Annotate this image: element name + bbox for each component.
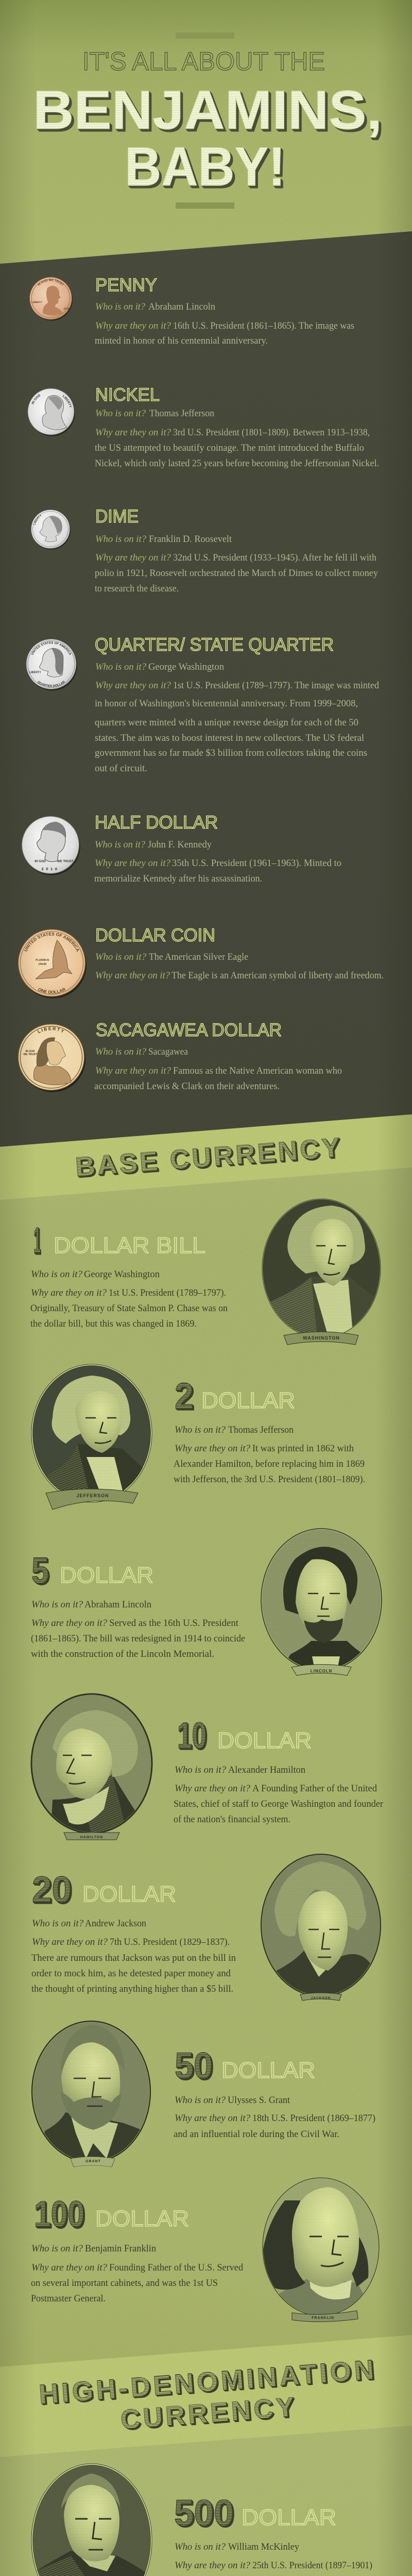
text: 500 dollar facts: 25th U.S. President (1897–1901) xyxy=(252,2561,372,2571)
portrait: Washington xyxy=(260,1196,383,1345)
text: 10 dollar facts xyxy=(174,1765,383,1825)
text: penny facts: minted in honor of his centennial anniversary. xyxy=(95,336,268,346)
text: nickel facts: Thomas Jefferson xyxy=(149,409,214,419)
text: 50 dollar facts: and an influential role during the Civil War. xyxy=(174,2129,339,2140)
text: quarter facts: in honor of Washington's bicentennial anniversary. From 1999–2008, xyxy=(95,699,358,709)
coin: penny: IN GOD WE TRUST xyxy=(37,279,64,286)
text: nickel facts: the US attempted to beautify coinage. The mint introduced the Buffalo xyxy=(95,443,364,453)
heading: 20 dollar xyxy=(32,1870,176,1910)
text: sacagawea facts: Who is on it? xyxy=(95,1047,147,1057)
heading: dime: DIME xyxy=(95,506,139,527)
text: 20 dollar facts: order to mock him, as he detested paper money and xyxy=(31,1969,231,1979)
coin: sacagawea dollar: LIBERTY xyxy=(37,1027,64,1033)
text: 20 dollar facts: Why are they on it? xyxy=(32,1937,108,1947)
coin: nickel: LIBERTY xyxy=(62,395,72,407)
text: dollar coin facts: The American Silver Eagle xyxy=(149,952,248,962)
coin item: nickel xyxy=(28,385,379,469)
text: half dollar facts: John F. Kennedy xyxy=(148,840,212,850)
coin item: dollar coin xyxy=(19,925,384,998)
heading: 1 dollar bill xyxy=(33,1221,205,1261)
heading: quarter: QUARTER/ STATE QUARTER xyxy=(95,635,334,655)
text: 20 dollar facts: Andrew Jackson xyxy=(85,1919,146,1929)
text: dime facts: to research the disease. xyxy=(95,584,179,594)
text: penny facts: Why are they on it? xyxy=(95,321,171,331)
portrait banner: JEFFERSON xyxy=(76,1493,109,1498)
portrait banner: WASHINGTON xyxy=(303,1335,340,1341)
text: 50 dollar facts xyxy=(174,2095,375,2140)
text: dime facts: Why are they on it? xyxy=(95,553,171,563)
text: 1 dollar facts: the dollar bill, but this was changed in 1869. xyxy=(30,1319,197,1329)
heading: 20 dollar: 20 xyxy=(32,1870,72,1910)
coin: dollar coin: PLURIBUS xyxy=(36,959,49,962)
panel: high-denomination currency xyxy=(0,2335,412,2576)
text: quarter facts xyxy=(95,662,380,774)
coin item: quarter xyxy=(26,635,380,774)
text: 50 dollar facts: Why are they on it? xyxy=(175,2113,251,2124)
text: dime facts: Who is on it? xyxy=(95,534,147,545)
coin: sacagawea dollar xyxy=(19,1024,85,1092)
text: 50 dollar facts: 18th U.S. President (1869–1877) xyxy=(252,2113,375,2124)
portrait banner xyxy=(292,2311,358,2322)
portrait: Grant xyxy=(29,2020,153,2167)
coin: dollar coin: UNITED STATES OF AMERICA xyxy=(24,933,79,952)
text: 100 dollar facts: Who is on it? xyxy=(31,2244,83,2254)
panel: header xyxy=(0,0,412,264)
text: 2 dollar facts: Thomas Jefferson xyxy=(228,1425,294,1435)
portrait banner xyxy=(284,1332,358,1345)
coin: penny: 2010 xyxy=(63,307,70,310)
text: half dollar facts: 35th U.S. President (1961–1963). Minted to xyxy=(172,858,341,869)
text: 50 dollar facts: Who is on it? xyxy=(175,2095,226,2106)
coin: dime xyxy=(31,510,71,550)
portrait banner xyxy=(300,1993,341,2001)
heading: high-denomination currency: HIGH-DENOMINATION xyxy=(38,2354,375,2410)
text: dime facts xyxy=(95,534,379,594)
coin: quarter: UNITED STATES OF AMERICA xyxy=(31,641,71,655)
heading: 5 dollar xyxy=(31,1551,153,1591)
section band: high-denomination xyxy=(0,2335,412,2457)
portrait: Hamilton xyxy=(30,1691,153,1840)
heading: 50 dollar: DOLLAR xyxy=(221,2058,315,2083)
coin: nickel xyxy=(28,388,75,436)
coin: half dollar: WE TRUST xyxy=(57,859,74,863)
portrait banner: FRANKLIN xyxy=(312,2316,334,2320)
bill item: 100 dollar xyxy=(31,2175,383,2322)
portrait banner xyxy=(64,1833,119,1840)
text: nickel facts: Who is on it? xyxy=(95,409,146,419)
coin item: penny xyxy=(30,275,354,346)
heading: 50 dollar: 50 xyxy=(175,2046,213,2087)
text: penny facts xyxy=(95,302,354,346)
heading: 10 dollar xyxy=(177,1716,312,1756)
text: sacagawea facts: Famous as the Native American woman who xyxy=(173,1066,342,1076)
title: main lines: BABY! xyxy=(125,135,285,197)
heading: 1 dollar bill: DOLLAR BILL xyxy=(54,1233,205,1258)
text: penny facts: Abraham Lincoln xyxy=(148,302,215,312)
coin item: sacagawea dollar xyxy=(19,1020,342,1092)
decorative bar: bottom xyxy=(176,202,234,209)
decorative bar: top xyxy=(176,32,234,39)
text: 5 dollar facts: Why are they on it? xyxy=(31,1618,108,1629)
coin: quarter: QUARTER DOLLAR xyxy=(38,681,65,687)
text: 500 dollar facts xyxy=(174,2542,372,2576)
text: 10 dollar facts: Alexander Hamilton xyxy=(228,1765,305,1775)
heading: 100 dollar: DOLLAR xyxy=(95,2206,189,2231)
portrait banner: HAMILTON xyxy=(80,1836,103,1839)
coin: penny xyxy=(30,277,73,320)
text: quarter facts: George Washington xyxy=(148,662,224,672)
text: nickel facts xyxy=(95,409,379,469)
text: dollar coin facts xyxy=(95,952,384,981)
portrait banner xyxy=(71,2157,115,2167)
text: 100 dollar facts xyxy=(31,2244,244,2304)
bill item: 20 dollar xyxy=(31,1853,383,2001)
text: 2 dollar facts: Why are they on it? xyxy=(175,1444,251,1454)
text: 50 dollar facts: Ulysses S. Grant xyxy=(228,2095,290,2106)
text: 10 dollar facts: of the nation's financial system. xyxy=(174,1815,290,1825)
heading: 500 dollar xyxy=(174,2493,336,2534)
heading: 5 dollar: DOLLAR xyxy=(60,1563,153,1588)
text: 2 dollar facts: Who is on it? xyxy=(175,1425,226,1435)
panel: base currency xyxy=(0,1114,412,2367)
heading: base currency: BASE CURRENCY xyxy=(74,1132,341,1182)
text: 500 dollar facts: William McKinley xyxy=(228,2542,300,2552)
portrait banner xyxy=(291,1664,351,1675)
text: dime facts: polio in 1921, Roosevelt orchestrated the March of Dimes to collect money xyxy=(95,568,379,579)
heading: high-denomination currency xyxy=(38,2354,375,2435)
heading: high-denomination currency: CURRENCY xyxy=(119,2392,295,2435)
text: 100 dollar facts: Benjamin Franklin xyxy=(85,2244,156,2254)
heading: 10 dollar: 10 xyxy=(177,1716,207,1756)
text: 1 dollar facts: 1st U.S. President (1789–1797). xyxy=(109,1288,226,1298)
text: 20 dollar facts: There are rumours that Jackson was put on the bill in xyxy=(31,1953,236,1963)
text: 1 dollar facts: Originally, Treasury of State Salmon P. Chase was on xyxy=(30,1303,228,1314)
text: 2 dollar facts: with Jefferson, the 3rd U.S. President (1801–1809). xyxy=(174,1475,365,1485)
portrait banner: JACKSON xyxy=(311,1996,331,2000)
heading: dollar coin: DOLLAR COIN xyxy=(95,925,215,945)
text: half dollar facts: Who is on it? xyxy=(95,840,146,850)
text: 2 dollar facts xyxy=(174,1425,365,1485)
heading: 1 dollar bill: 1 xyxy=(33,1221,41,1261)
coin: half dollar: 2010 xyxy=(41,867,60,871)
heading: 5 dollar: 5 xyxy=(31,1551,49,1591)
heading: penny: PENNY xyxy=(95,275,157,295)
bill item: 2 dollar xyxy=(30,1361,365,1510)
text: quarter facts: Why are they on it? xyxy=(95,681,171,691)
coin: dollar coin: ONE DOLLAR xyxy=(38,988,66,994)
text: quarter facts: out of circuit. xyxy=(95,764,147,774)
text: 100 dollar facts: on several important cabinets, and was the 1st US xyxy=(31,2278,218,2289)
text: nickel facts: 3rd U.S. President (1801–1809). Between 1913–1938, xyxy=(173,428,370,438)
text: quarter facts: states. The aim was to boost interest in new collectors. The US federal xyxy=(95,733,364,743)
text: 10 dollar facts: A Founding Father of the United xyxy=(252,1784,377,1794)
text: quarter facts: government has so far made $3 billion from collectors taking the coins xyxy=(95,748,367,758)
heading: 500 dollar: 500 xyxy=(174,2493,234,2534)
text: 500 dollar facts: Why are they on it? xyxy=(175,2561,251,2571)
text: 5 dollar facts xyxy=(31,1600,245,1659)
coin item: dime xyxy=(31,506,379,594)
text: 5 dollar facts: (1861–1865). The bill was redesigned in 1914 to coincide xyxy=(31,1634,245,1644)
heading: 20 dollar: DOLLAR xyxy=(82,1882,176,1907)
portrait: Lincoln xyxy=(260,1528,383,1675)
text: 10 dollar facts: Why are they on it? xyxy=(175,1784,251,1794)
text: 5 dollar facts: Abraham Lincoln xyxy=(84,1600,151,1610)
text: 500 dollar facts: Who is on it? xyxy=(175,2542,226,2552)
bill item: 500 dollar xyxy=(30,2463,372,2576)
section band: base currency xyxy=(0,1114,412,1200)
text: 20 dollar facts: 7th U.S. President (1829–1837). xyxy=(110,1937,230,1947)
text: 2 dollar facts: Alexander Hamilton, before replacing him in 1869 xyxy=(174,1459,365,1469)
text: sacagawea facts: Sacagawea xyxy=(148,1047,188,1057)
title: main lines xyxy=(33,79,382,197)
coin: nickel: IN GOD xyxy=(31,395,40,404)
heading: nickel: NICKEL xyxy=(95,385,160,405)
text: dime facts: Franklin D. Roosevelt xyxy=(149,534,232,545)
text: 1 dollar facts: Why are they on it? xyxy=(31,1288,107,1298)
heading: 2 dollar: DOLLAR xyxy=(201,1388,295,1413)
text: quarter facts: quarters were minted with a unique reverse design for each of the 50 xyxy=(95,718,358,728)
portrait banner: LINCOLN xyxy=(311,1669,332,1673)
coin: quarter: LIBERTY xyxy=(29,671,41,674)
coin: sacagawea dollar: WE TRUST xyxy=(23,1053,38,1056)
portrait: McKinley xyxy=(30,2463,153,2576)
heading: 100 dollar: 100 xyxy=(34,2194,84,2235)
text: dime facts: 32nd U.S. President (1933–1945). After he fell ill with xyxy=(173,553,376,563)
portrait banner xyxy=(46,1489,138,1510)
bill item: 5 dollar xyxy=(31,1528,383,1675)
title: small line: IT'S ALL ABOUT THE xyxy=(82,47,325,76)
text: quarter facts: 1st U.S. President (1789–1797). The image was minted xyxy=(173,681,380,691)
coin: half dollar: IN GOD xyxy=(35,859,46,863)
text: 100 dollar facts: Founding Father of the U.S. Served xyxy=(109,2263,244,2273)
bill item: 50 dollar xyxy=(29,2020,375,2167)
portrait banner: GRANT xyxy=(85,2160,101,2163)
text: penny facts: Who is on it? xyxy=(95,302,146,312)
text: 100 dollar facts: Why are they on it? xyxy=(31,2263,108,2273)
text: 1 dollar facts xyxy=(30,1269,228,1329)
text: 20 dollar facts xyxy=(31,1919,236,1994)
coin: dime: LIBERTY xyxy=(33,514,41,525)
text: 100 dollar facts: Postmaster General. xyxy=(31,2294,106,2304)
text: 10 dollar facts: Who is on it? xyxy=(175,1765,227,1775)
heading: 10 dollar: DOLLAR xyxy=(217,1728,312,1753)
text: dollar coin facts: Why are they on it? xyxy=(95,971,170,981)
text: nickel facts: Why are they on it? xyxy=(95,428,171,438)
text: 5 dollar facts: with the construction of the Lincoln Memorial. xyxy=(31,1649,214,1659)
text: 5 dollar facts: Served as the 16th U.S. President xyxy=(109,1618,239,1629)
text: dollar coin facts: Who is on it? xyxy=(95,952,147,962)
coin: dollar coin: UNUM xyxy=(39,963,46,966)
text: 1 dollar facts: Who is on it? xyxy=(31,1269,83,1280)
coin: sacagawea dollar: IN GOD xyxy=(25,1050,35,1053)
text: half dollar facts: Why are they on it? xyxy=(95,858,171,869)
portrait: Jefferson xyxy=(30,1361,153,1510)
heading: 2 dollar: 2 xyxy=(175,1376,194,1417)
heading: half dollar: HALF DOLLAR xyxy=(95,812,218,833)
coin: quarter xyxy=(26,639,77,690)
text: sacagawea facts: Why are they on it? xyxy=(95,1066,171,1076)
heading: 2 dollar xyxy=(175,1376,295,1417)
text: 20 dollar facts: Who is on it? xyxy=(32,1919,84,1929)
text: 5 dollar facts: Who is on it? xyxy=(31,1600,83,1610)
text: sacagawea facts: accompanied Lewis & Clark on their adventures. xyxy=(94,1081,280,1092)
text: 10 dollar facts: States, chief of staff to George Washington and founder xyxy=(174,1799,383,1809)
text: penny facts: 16th U.S. President (1861–1865). The image was xyxy=(173,321,354,331)
coin: half dollar xyxy=(22,816,80,875)
text: 20 dollar facts: the thought of printing anything higher than a $5 bill. xyxy=(31,1984,233,1994)
text: dollar coin facts: The Eagle is an American symbol of liberty and freedom. xyxy=(171,971,384,981)
text: sacagawea facts xyxy=(94,1047,342,1092)
bill item: 1 dollar xyxy=(30,1196,383,1345)
heading: 500 dollar: DOLLAR xyxy=(242,2505,336,2530)
text: quarter facts: Who is on it? xyxy=(95,662,147,672)
panel: coins xyxy=(0,231,411,1092)
text: half dollar facts xyxy=(94,840,341,884)
heading: 100 dollar xyxy=(34,2194,189,2235)
heading: sacagawea dollar: SACAGAWEA DOLLAR xyxy=(96,1020,282,1040)
portrait: Jackson xyxy=(259,1853,383,2001)
coin: penny: LIBERTY xyxy=(31,301,43,304)
title: main lines: BENJAMINS, xyxy=(33,79,382,141)
text: half dollar facts: memorialize Kennedy after his assassination. xyxy=(94,874,262,884)
bill item: 10 dollar xyxy=(30,1691,383,1840)
portrait: Franklin xyxy=(259,2175,383,2322)
text: nickel facts: Nickel, which only lasted 25 years before becoming the Jeffersonian Nickel. xyxy=(95,459,379,469)
text: 1 dollar facts: George Washington xyxy=(84,1269,160,1280)
coin: dollar coin xyxy=(19,929,87,998)
text: 2 dollar facts: It was printed in 1862 with xyxy=(252,1444,354,1454)
coin item: half dollar xyxy=(22,812,341,884)
heading: 50 dollar xyxy=(175,2046,315,2087)
